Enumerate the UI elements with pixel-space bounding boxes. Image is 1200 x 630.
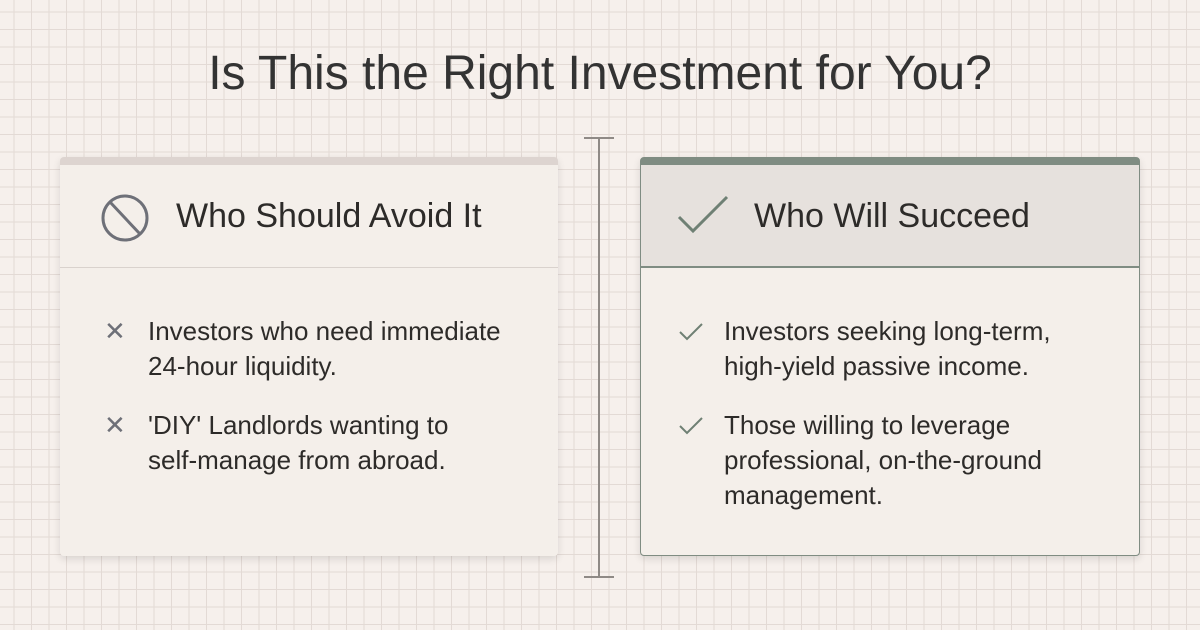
icon: check small (679, 323, 703, 340)
title: Is This the Right Investment for You? (208, 47, 992, 100)
bullet list: avoid: ✕ (104, 410, 126, 440)
bullet list: avoid: ✕ (104, 316, 126, 346)
bullet list: avoid: Investors who need immediate (148, 316, 501, 346)
icon: check small (679, 417, 703, 434)
bullet list: succeed (679, 316, 1051, 510)
header: avoid: Who Should Avoid It (176, 197, 482, 235)
panel: succeed (640, 157, 1140, 556)
bullet list: succeed: professional, on-the-ground (724, 445, 1042, 475)
bullet list: avoid: 24-hour liquidity. (148, 351, 337, 381)
bullet list: avoid (104, 316, 501, 475)
bullet list: succeed: Investors seeking long-term, (724, 316, 1051, 346)
bullet list: avoid: 'DIY' Landlords wanting to (148, 410, 448, 440)
header: succeed: Who Will Succeed (754, 197, 1030, 235)
bullet list: succeed: high-yield passive income. (724, 351, 1029, 381)
icon: prohibited (102, 194, 148, 242)
divider line (584, 137, 614, 578)
header: succeed (641, 165, 1139, 268)
bullet list: succeed: Those willing to leverage (724, 410, 1010, 440)
bullet list: succeed: management. (724, 480, 883, 510)
panel: avoid: self-manage from abroad. (148, 445, 446, 475)
header: avoid (60, 165, 558, 268)
panel: avoid (60, 157, 558, 556)
icon: check (678, 196, 728, 233)
